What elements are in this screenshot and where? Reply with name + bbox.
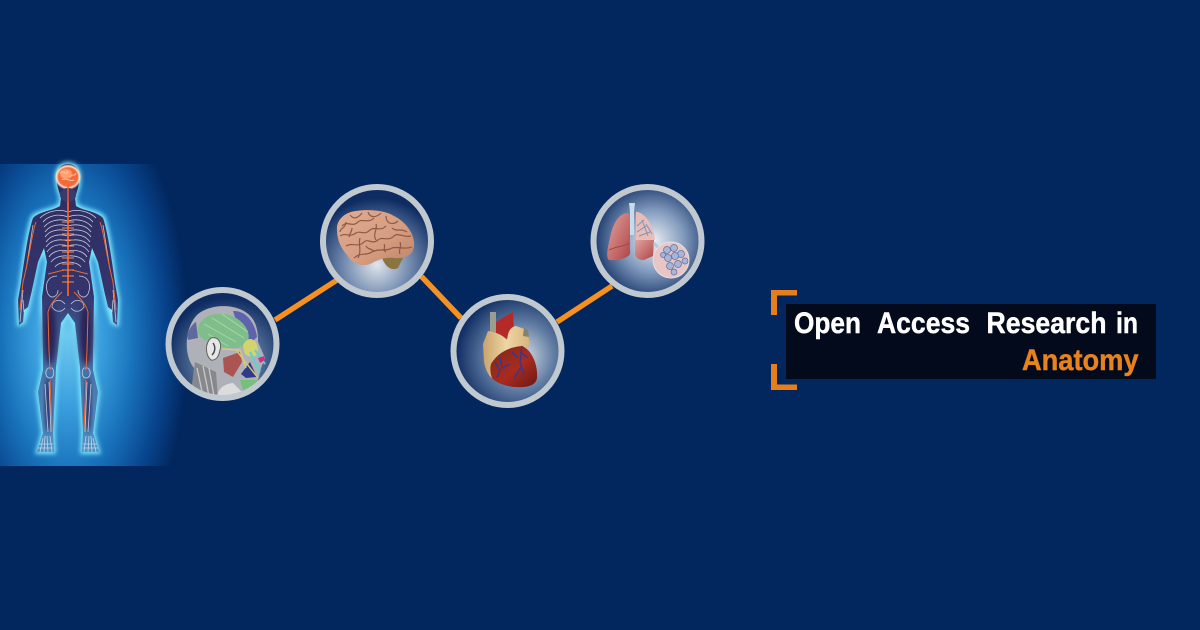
title line one: Research — [986, 307, 1106, 340]
connector: heart to lungs — [557, 286, 612, 322]
title line one: Open — [794, 307, 861, 340]
title line one: in — [1116, 307, 1138, 340]
icon: lungs — [594, 187, 702, 295]
body outer glow — [16, 162, 120, 454]
icon rings: brain, heart, lungs — [323, 187, 702, 405]
icon: head anatomy — [168, 290, 276, 400]
title line one — [794, 307, 1138, 340]
icon: brain — [323, 187, 431, 295]
connector: head to brain — [275, 280, 337, 320]
title line two: Anatomy — [1022, 344, 1139, 377]
infographic canvas — [0, 158, 1156, 466]
connector: brain to heart — [422, 276, 461, 318]
bracket: bottom left — [771, 364, 797, 390]
body right half — [68, 164, 118, 452]
title background — [786, 304, 1156, 379]
title block — [771, 290, 1156, 390]
panel: human body illustration — [0, 162, 190, 466]
title line one: Access — [877, 307, 970, 340]
body glow panel — [0, 164, 190, 466]
bracket: top left — [771, 290, 797, 315]
spine — [62, 180, 74, 296]
brain in head — [56, 165, 80, 204]
body left half — [18, 164, 68, 452]
icon: heart — [454, 297, 562, 405]
